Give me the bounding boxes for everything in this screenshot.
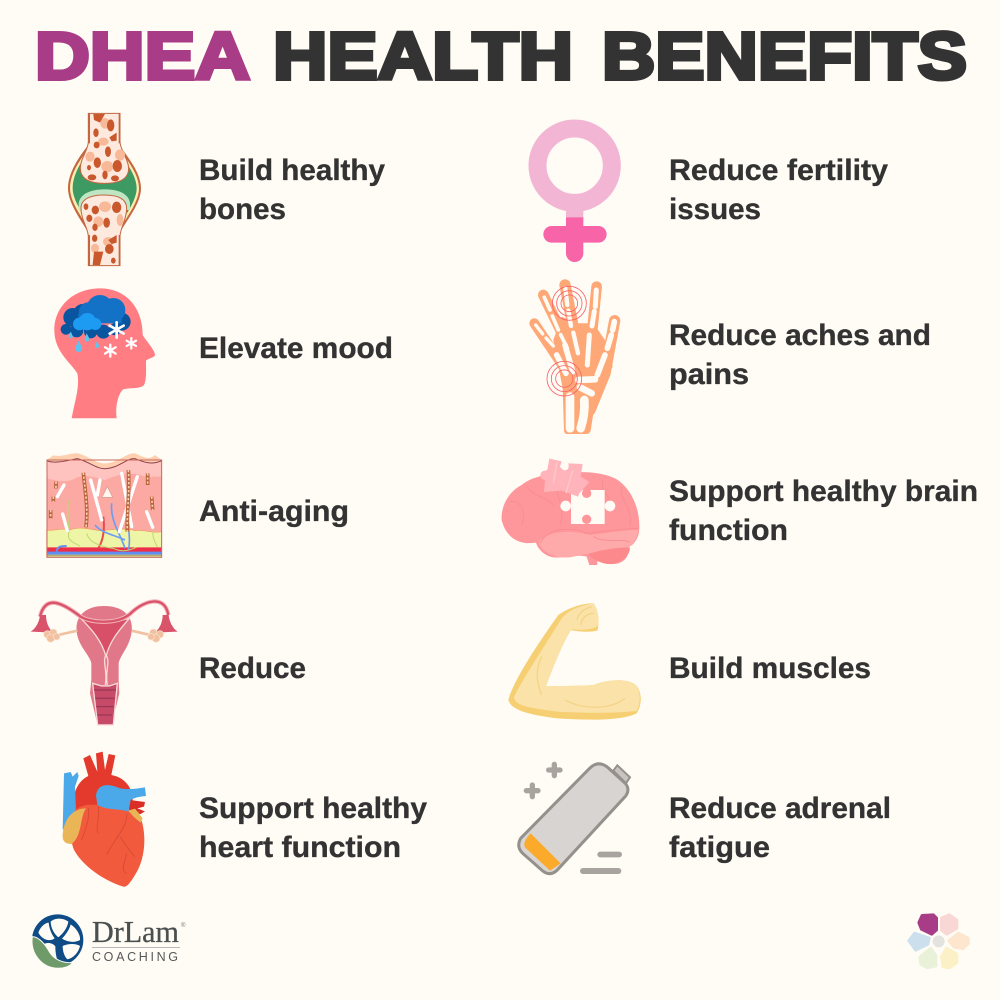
text: support healthy heart function: Support healthy: [199, 792, 427, 825]
text: support healthy heart function: [199, 792, 427, 864]
benefit: build muscles: [508, 603, 871, 720]
icon: uterus: [31, 601, 178, 725]
icon: female symbol: [537, 128, 612, 262]
text: reduce adrenal fatigue: fatigue: [669, 831, 770, 864]
benefit: build healthy bones: [68, 113, 385, 266]
icon: head with storm cloud: [54, 288, 155, 418]
text: reduce aches and pains: Reduce aches and: [669, 319, 931, 352]
text: support healthy brain function: function: [669, 514, 788, 547]
icon: skin cross-section: [47, 453, 162, 557]
registered mark: ®: [181, 922, 186, 929]
text: elevate mood: Elevate mood: [199, 332, 393, 365]
text: build muscles: Build muscles: [669, 652, 871, 685]
icon: brain with puzzle: [502, 459, 639, 565]
text: support healthy brain function: [669, 475, 978, 547]
text: DrLam: DrLam: [92, 914, 179, 949]
icon: flexed arm: [508, 603, 641, 720]
icon: colour flower mark: [909, 915, 969, 968]
title: BENEFITS: [602, 19, 967, 94]
icon: low battery: [519, 764, 630, 874]
icon: logo flower: [32, 914, 83, 968]
text: reduce fertility issues: issues: [669, 193, 761, 226]
logo: DrLam Coaching: [32, 914, 186, 968]
text: reduce aches and pains: [669, 319, 931, 391]
benefit: support healthy heart function: [63, 752, 427, 887]
text: reduce aches and pains: pains: [669, 358, 749, 391]
benefit: elevate mood: [54, 288, 393, 418]
benefit: reduce adrenal fatigue: [519, 764, 891, 874]
title: HEALTH: [273, 19, 573, 94]
icon: bone joint: [68, 113, 141, 266]
text: support healthy brain function: Support healthy brain: [669, 475, 978, 508]
benefit: reduce aches and pains: [534, 285, 931, 434]
text: reduce adrenal fatigue: Reduce adrenal: [669, 792, 891, 825]
benefit: reduce: [31, 601, 306, 725]
text: reduce: Reduce: [199, 652, 306, 685]
icon: hand skeleton: [534, 285, 615, 434]
title: [35, 19, 967, 94]
text: COACHING: COACHING: [92, 950, 178, 964]
text: build healthy bones: bones: [199, 193, 286, 226]
text: reduce fertility issues: Reduce fertility: [669, 154, 888, 187]
text: build healthy bones: Build healthy: [199, 154, 385, 187]
title: DHEA: [35, 19, 250, 94]
icon: heart: [63, 752, 146, 887]
text: reduce adrenal fatigue: [669, 792, 891, 864]
benefit: support healthy brain function: [502, 459, 978, 565]
text: anti-aging: Anti-aging: [199, 495, 349, 528]
divider: [92, 947, 180, 948]
text: reduce fertility issues: [669, 154, 888, 226]
text: build healthy bones: [199, 154, 385, 226]
benefit: anti-aging: [47, 453, 349, 557]
text: support healthy heart function: heart function: [199, 831, 401, 864]
benefit: reduce fertility issues: [537, 128, 888, 262]
